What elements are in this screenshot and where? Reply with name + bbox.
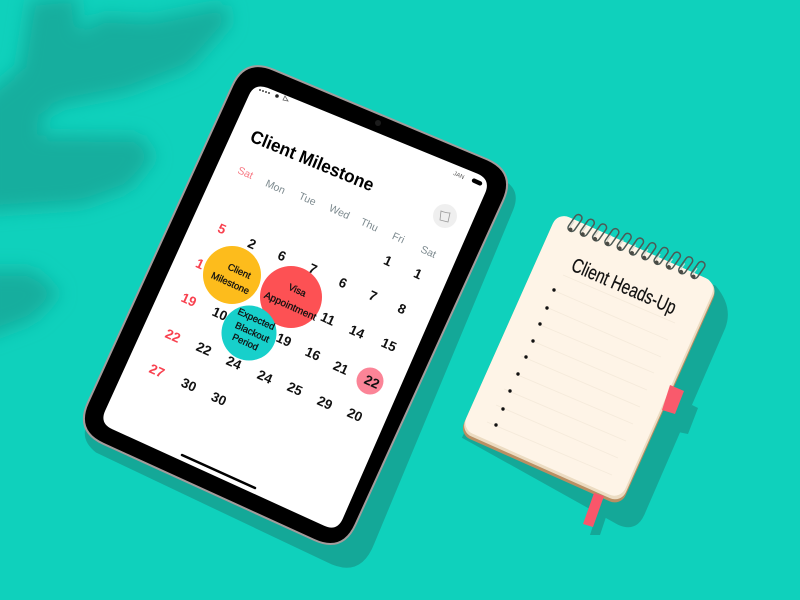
black dates: 6: [275, 248, 289, 264]
tablet shadow: [76, 65, 534, 577]
black dates: 7: [306, 261, 319, 277]
black dates: 15: [379, 335, 399, 355]
red event: Visa Appointment: Appointment: [262, 290, 318, 323]
weekday labels: Fri: [390, 230, 406, 246]
black dates: 20: [345, 405, 365, 425]
weekday labels: Sat: [236, 165, 255, 182]
weekday labels: [236, 165, 438, 261]
black dates: 1: [411, 266, 425, 282]
black dates: 14: [347, 322, 367, 342]
status bar right: JAN: [452, 171, 465, 181]
spiral rings: [566, 213, 706, 280]
highlighted date: [356, 368, 384, 394]
notebook edge: [459, 215, 718, 506]
black dates: [179, 236, 425, 425]
black dates: 7: [366, 288, 379, 304]
teal event: Expected Blackout Period: [222, 306, 276, 360]
red dates: 19: [179, 290, 199, 310]
black dates: 30: [179, 375, 199, 395]
weekday labels: Wed: [327, 202, 352, 222]
tablet: [75, 51, 516, 553]
red dates: 27: [147, 361, 167, 381]
black dates: 8: [395, 301, 409, 317]
black dates: 25: [285, 379, 305, 399]
black dates: 19: [274, 330, 294, 350]
black dates: 30: [209, 389, 229, 409]
red event: Visa Appointment: [260, 266, 322, 328]
tablet body: [75, 51, 516, 553]
black dates: 16: [303, 344, 323, 364]
leaf shadow: [0, 0, 230, 340]
black dates: 24: [255, 367, 275, 387]
red dates: 5: [215, 221, 229, 237]
teal event: Expected Blackout Period: Expected: [236, 307, 276, 333]
page tab: [662, 385, 684, 414]
notebook title: Client Heads-Up: [568, 254, 679, 319]
bookmark ribbon: [583, 493, 604, 527]
weekday labels: Thu: [359, 216, 380, 235]
black dates: 1: [381, 253, 395, 269]
black dates: 21: [331, 358, 351, 378]
red dates: 1: [193, 256, 207, 272]
weekday labels: Tue: [297, 190, 318, 208]
teal event: Expected Blackout Period: Blackout: [233, 320, 271, 345]
black dates: 22: [362, 372, 382, 392]
ruled lines: [487, 275, 675, 475]
teal event: Expected Blackout Period: Period: [230, 332, 260, 353]
black dates: 29: [315, 393, 335, 413]
notebook: [459, 212, 720, 506]
black dates: 6: [336, 275, 350, 291]
black dates: 22: [194, 339, 214, 359]
status bar left: [259, 89, 288, 101]
home indicator: [182, 455, 255, 488]
black dates: 24: [224, 353, 244, 373]
bullets: [494, 288, 556, 427]
yellow event: Client Milestone: Client: [226, 262, 253, 282]
tablet screen: [99, 74, 496, 532]
heading: Client Milestone: [247, 126, 377, 195]
status bar right: [452, 171, 483, 186]
weekday labels: Mon: [263, 178, 287, 197]
red dates: [147, 221, 229, 381]
black dates: 10: [210, 304, 230, 324]
black dates: 11: [318, 309, 338, 329]
red dates: 22: [163, 326, 183, 346]
camera: [375, 120, 381, 126]
share button: [433, 204, 457, 228]
black dates: 2: [245, 236, 258, 252]
yellow event: Client Milestone: [203, 246, 261, 304]
notebook page: [461, 212, 717, 500]
notebook shadow: [455, 217, 741, 535]
weekday labels: Sat: [419, 244, 438, 261]
red event: Visa Appointment: Visa: [286, 282, 308, 300]
yellow event: Client Milestone: Milestone: [209, 270, 251, 297]
